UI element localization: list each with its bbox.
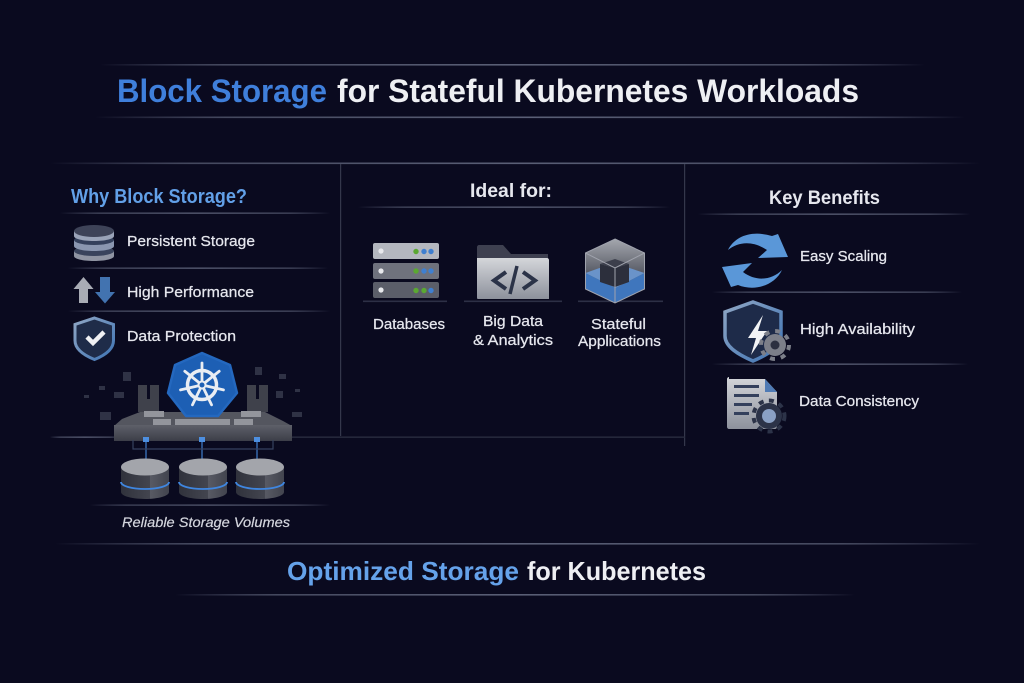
icon: code folder — [477, 245, 549, 299]
label: stateful applications: Applications — [578, 333, 661, 350]
heading: ideal for: Ideal for: — [470, 181, 552, 202]
connectors — [133, 440, 273, 459]
label: big data and analytics — [473, 313, 553, 349]
title: Block Storage — [117, 73, 327, 109]
scattered data blocks — [84, 367, 302, 420]
storage volume 3 — [236, 458, 284, 499]
heading: why block storage: Why Block Storage? — [71, 186, 247, 208]
panel: why block storage — [60, 186, 330, 530]
text: data consistency: Data Consistency — [799, 393, 920, 410]
icon: shield check — [75, 318, 114, 360]
platform — [114, 412, 292, 426]
text: high performance: High Performance — [127, 284, 254, 301]
text: high availability: High Availability — [800, 321, 916, 338]
label: stateful applications: Stateful — [591, 316, 646, 333]
icon: shield bolt gear — [725, 302, 789, 361]
caption: reliable storage volumes: Reliable Storage Volumes — [122, 514, 290, 530]
icon: database stack — [74, 225, 114, 261]
panel: ideal for — [358, 181, 670, 350]
label: big data and analytics: & Analytics — [473, 332, 553, 349]
illustration: kubernetes platform — [84, 353, 302, 499]
label: stateful applications — [578, 316, 661, 350]
icon: stateful cube — [586, 239, 644, 303]
text: easy scaling: Easy Scaling — [800, 248, 887, 265]
text: data protection: Data Protection — [127, 328, 236, 345]
label: big data and analytics: Big Data — [483, 313, 544, 330]
icon: document gear — [727, 377, 784, 432]
storage volume 2 — [179, 458, 227, 499]
title — [117, 73, 859, 109]
panel: key benefits — [698, 188, 970, 432]
icon: up and down arrows — [74, 277, 115, 304]
icon: sync arrows — [722, 234, 788, 288]
title: for Stateful Kubernetes Workloads — [337, 73, 859, 109]
towers — [138, 385, 159, 412]
storage volume 1 — [121, 458, 169, 499]
heading: key benefits: Key Benefits — [769, 188, 880, 209]
icon: database servers — [373, 243, 439, 298]
footer tagline: Optimized Storage — [287, 556, 519, 586]
text: persistent storage: Persistent Storage — [127, 233, 255, 250]
label: databases: Databases — [373, 316, 445, 333]
footer tagline — [287, 556, 706, 586]
footer tagline: for Kubernetes — [527, 556, 706, 586]
kubernetes logo — [168, 353, 237, 416]
